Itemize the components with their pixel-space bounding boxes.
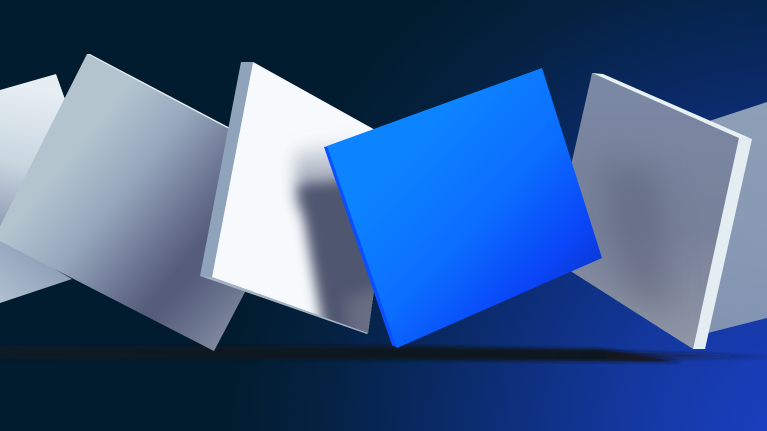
panel: far left light square: [0, 74, 72, 303]
panel: right grey square: [571, 73, 752, 349]
floor shadow: [0, 346, 767, 362]
panel: far right grey square: [700, 102, 767, 335]
panel: bright blue square: [324, 68, 602, 348]
panel: large grey square: [0, 54, 309, 351]
panel: white square with shadow: [200, 62, 374, 334]
